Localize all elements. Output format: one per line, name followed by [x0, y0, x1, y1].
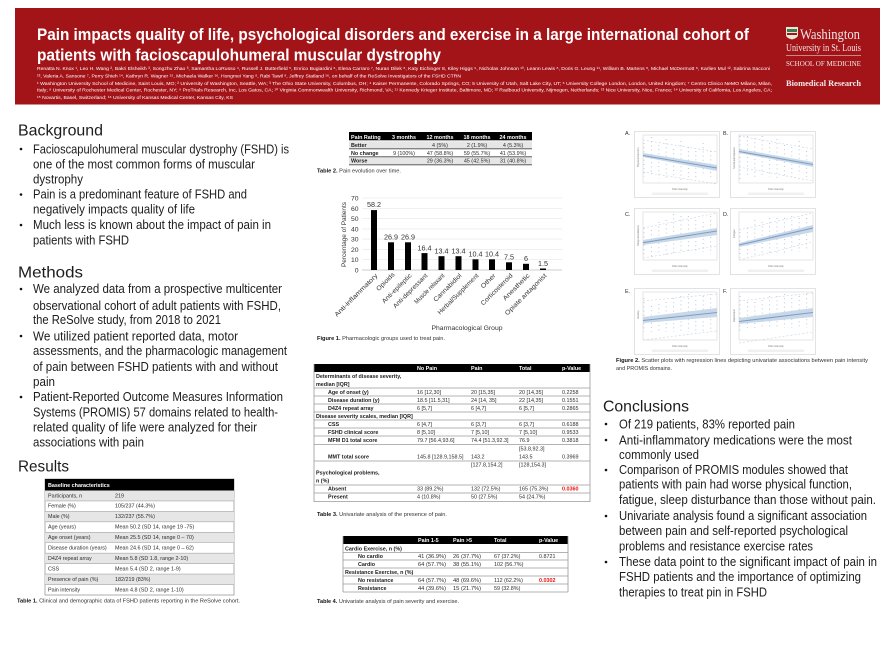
category labels: Muscle relaxant [413, 272, 447, 306]
table 3: presence of pain: [128,154.3] [519, 462, 546, 468]
methods bullets [20, 281, 287, 450]
methods bullets: We utilized patient reported data, motor [33, 328, 239, 343]
bar value labels: 26.9 [384, 232, 398, 242]
table 4: pain severity and exercise: 112 (62.2%) [494, 578, 523, 584]
table 4: pain severity and exercise: 26 (37.7%) [453, 554, 481, 560]
table 3: presence of pain: 165 (75.3%) [519, 486, 549, 492]
table 3: presence of pain: 6 [5,7] [519, 406, 534, 412]
table 3: presence of pain: No Pain [417, 366, 437, 372]
scatter plot F: depression [730, 288, 816, 354]
icon: shield [786, 27, 798, 40]
bar value labels: 13.4 [434, 246, 448, 256]
scatter plot B: social participation: Pain intensity [768, 187, 784, 191]
table 3: presence of pain: 20 [15,35] [471, 390, 495, 396]
table 2: 3 months [392, 135, 416, 141]
panel labels: B. [723, 131, 728, 137]
panel labels: A. [625, 131, 630, 137]
authors and affiliations: Italy; ⁸ University of Rochester Medical Center, Rochester, NY; ⁹ ProTrials Research, Inc, Los Gatos, CA; ¹⁰ Virginia Commonwealth University, Richmond, VA; ¹¹ Kennedy Krieger Institute, Baltimore, MD; ¹² Radboud University, Nijmegen, Netherlands; ¹³ Nice University, Nice, France; ¹⁴ University of California, Los Angeles, CA; [37, 88, 772, 92]
table 3: presence of pain: [127.8,154.2] [471, 462, 503, 468]
scatter plot C: sleep disturbance [634, 208, 720, 274]
table 3: presence of pain: Total [519, 366, 532, 372]
table 3: presence of pain: CSS [328, 422, 339, 428]
title: patients with facioscapulohumeral muscular dystrophy [37, 46, 442, 64]
category labels: Other [480, 272, 498, 290]
methods bullets: We analyzed data from a prospective multicenter [33, 281, 283, 296]
table 1: baseline characteristics: Mean 50.2 (SD 14, range 19 -75) [115, 525, 194, 531]
table 3: presence of pain: 143.5 [519, 454, 532, 460]
bar value labels [367, 200, 548, 268]
table 2: No change [351, 151, 379, 157]
bar value labels: 7.5 [504, 252, 514, 262]
panel: results [17, 459, 240, 604]
table 4: pain severity and exercise: 59 (32.8%) [494, 586, 521, 592]
bar value labels: 16.4 [418, 244, 432, 252]
table 3: presence of pain: 0.3818 [562, 438, 578, 444]
background bullets: dystrophy [33, 171, 83, 186]
table 3: presence of pain: D4Z4 repeat array [328, 406, 374, 412]
bar value labels: 6 [524, 254, 528, 263]
table 4 caption: Table 4. Univariate analysis of pain severity and exercise. [317, 599, 459, 605]
logo: Washington University School of Medicine: Biomedical Research [786, 79, 862, 88]
background bullets: negatively impacts quality of life [33, 202, 195, 217]
scatter plot A: physical function: Physical function [636, 147, 640, 167]
conclusions bullets: Of 219 patients, 83% reported pain [619, 416, 795, 431]
methods bullets: the ReSolve study, from 2018 to 2021 [33, 312, 221, 327]
category labels: Corticosteroid [480, 272, 515, 307]
table 3: presence of pain: Determinants of disease severity, [316, 374, 402, 380]
table 1: baseline characteristics: D4Z4 repeat array [48, 556, 92, 562]
background bullets: patients with FSHD [33, 232, 129, 247]
table 3: presence of pain: 6 [3,7] [471, 422, 486, 428]
table 4: pain severity and exercise: 102 (56.7%) [494, 562, 524, 568]
table 2 [349, 132, 532, 165]
table 3: presence of pain: 6 [4,7] [417, 422, 432, 428]
table 3: presence of pain: Absent [328, 486, 346, 492]
table 3: presence of pain: 143.2 [471, 454, 484, 460]
table 3: presence of pain: Disease severity scales, median [IQR] [316, 414, 413, 420]
table 2: 4 (5.3%) [503, 143, 523, 149]
scatter plot A: physical function: Pain intensity [672, 187, 688, 191]
table 3: presence of pain: 132 (72.5%) [471, 486, 501, 492]
table 2: Better [351, 143, 367, 149]
table 2: Worse [351, 159, 367, 165]
y axis title: Percentage of Patients [341, 202, 348, 267]
panel labels [625, 131, 728, 295]
table 1: baseline characteristics: Age (years) [48, 525, 76, 531]
table 3: presence of pain: 79.7 [56.4,93.6] [417, 438, 455, 444]
methods bullets: Systems (PROMIS) 57 domains related to health- [33, 405, 278, 420]
table 4: pain severity and exercise: Cardio Exercise, n (%) [345, 546, 402, 552]
table 3: presence of pain: 7 [5,10] [519, 430, 537, 436]
category labels: Opiate antagonist [504, 272, 549, 317]
table 3: presence of pain: 0.2258 [562, 390, 578, 396]
scatter plot E: anxiety: Pain intensity [672, 344, 688, 348]
table 2: 59 (55.7%) [464, 151, 490, 157]
table 3: presence of pain: 0.0360 [562, 486, 578, 492]
table 4: pain severity and exercise: 48 (69.6%) [453, 578, 481, 584]
conclusions bullets: commonly used [619, 447, 699, 462]
table 3: presence of pain: 74.4 [51.3,92.3] [471, 438, 509, 444]
authors and affiliations: ¹⁵ Novartis, Basel, Switzerland; ¹⁶ University of Kansas Medical Center, Kansas City, KS [37, 95, 233, 100]
table 1: baseline characteristics: Mean 5.8 (SD 1.8, range 2-10) [115, 556, 188, 562]
y axis labels: 10 [351, 257, 359, 264]
logo: Washington University School of Medicine: Washington [800, 27, 860, 43]
table 1 caption: Table 1. Clinical and demographic data of FSHD patients reporting in the ReSolve cohort. [17, 598, 240, 604]
scatter plot D: fatigue: Fatigue [732, 229, 736, 238]
table 3: presence of pain: Psychological problems, [316, 470, 380, 476]
table 4: pain severity and exercise: 38 (55.1%) [453, 562, 481, 568]
table 1: baseline characteristics: Disease duration (years) [48, 546, 107, 552]
table 3: presence of pain: MMT total score [328, 454, 369, 460]
logo: Washington University School of Medicine: SCHOOL OF MEDICINE [786, 59, 861, 68]
scatter plot F: depression: Pain intensity [768, 344, 784, 348]
table 2: 2 (1.9%) [467, 143, 487, 149]
table 4: pain severity and exercise: 0.8721 [539, 554, 556, 560]
table 3: presence of pain: 0.1551 [562, 398, 578, 404]
table 2: 12 months [427, 135, 453, 141]
y axis labels: 60 [351, 206, 359, 213]
methods bullets: of pain between FSHD patients with and without [33, 359, 278, 374]
bars [371, 210, 546, 270]
table 1: baseline characteristics: Mean 4.8 (SD 2, range 1-10) [115, 587, 184, 593]
conclusions bullets: therapies to treat pin in FSHD [619, 585, 767, 600]
table 3: presence of pain: 20 [14,35] [519, 390, 543, 396]
bar value labels: 13.4 [452, 246, 466, 256]
y axis labels: 0 [355, 268, 359, 274]
logo: Washington University School of Medicine [786, 27, 862, 88]
table 4: pain severity and exercise: 15 (21.7%) [453, 586, 481, 592]
table 3: presence of pain: 0.2865 [562, 406, 578, 412]
table 1: baseline characteristics: Age onset (years) [48, 535, 91, 541]
heading: background: Background [18, 123, 103, 140]
table 2: 41 (53.9%) [500, 151, 526, 157]
table 4: pain severity and exercise: 41 (36.9%) [418, 554, 446, 560]
table 2: 31 (40.8%) [500, 159, 526, 165]
table 4: pain severity and exercise: No cardio [358, 554, 384, 560]
table 3: presence of pain: 145.8 [128.9,158.5] [417, 454, 464, 460]
scatter plot F: depression: Depression [732, 308, 736, 322]
table 4: pain severity and exercise: Pain 1-5 [418, 538, 439, 544]
table 3: presence of pain: Age of onset (y) [328, 390, 369, 396]
table 3: presence of pain: 8 [5,10] [417, 430, 435, 436]
table 3: presence of pain: MFM D1 total score [328, 438, 377, 444]
figure 2 caption [616, 358, 869, 372]
figure 2 caption: and PROMIS domains. [616, 366, 672, 372]
y axis labels [351, 196, 359, 274]
scatter plot C: sleep disturbance: Sleep disturbance [636, 225, 640, 246]
category labels: Herbal/Supplement [437, 272, 481, 316]
table 4: pain severity and exercise: p-Value [539, 538, 558, 544]
table 3: presence of pain [314, 364, 590, 502]
y axis labels: 30 [351, 237, 359, 244]
background bullets: Much less is known about the impact of pain in [33, 217, 271, 232]
table 3: presence of pain: Disease duration (y) [328, 398, 380, 404]
table 3: presence of pain: n (%) [316, 478, 329, 484]
table 1: baseline characteristics: CSS [48, 566, 59, 572]
table 1: baseline characteristics [45, 479, 234, 595]
table 3: presence of pain: median [IQR] [316, 382, 350, 388]
table 3: presence of pain: 18.5 [11.5,31] [417, 398, 450, 404]
table 3: presence of pain: FSHD clinical score [328, 430, 378, 436]
bar value labels: 10.4 [485, 250, 499, 258]
methods bullets: pain [33, 374, 55, 389]
table 2: 4 (5%) [432, 143, 448, 149]
panel labels: C. [625, 212, 630, 218]
bar value labels: 10.4 [468, 250, 482, 258]
y axis labels: 50 [351, 216, 359, 223]
authors and affiliations: ¹ Washington University School of Medicine, Saint Louis, MO; ² University of Washington, Seattle, WA; ³ The Ohio State University, Columbus, OH; ⁴ Kaiser Permanente, Colorado Springs, CO; 5 University of Utah, Salt Lake City, UT; ⁶ University College London, London, United Kingdom; ⁷ Centro Clinico NeMO Milano, Milan, [37, 81, 772, 86]
figure 1 caption: Figure 1. Pharmacologic groups used to treat pain. [317, 336, 445, 342]
table 3: presence of pain: p-Value [562, 366, 581, 372]
category labels: Anti-epileptic [381, 272, 414, 305]
panel labels: D. [723, 212, 728, 218]
table 1: baseline characteristics: 132/237 (55.7%) [115, 514, 155, 520]
table 4: pain severity and exercise: Resistance Exercise, n (%) [345, 570, 414, 576]
background bullets: one of the most common forms of muscular [33, 156, 256, 171]
table 4: pain severity and exercise [343, 536, 568, 592]
title: Pain impacts quality of life, psychological disorders and exercise in a large international cohort of [37, 25, 749, 44]
table 3: presence of pain: 54 (24.7%) [519, 494, 546, 500]
category labels: Anti-inflammatory [333, 272, 380, 318]
authors and affiliations [37, 66, 772, 100]
table 3 caption: Table 3. Univariate analysis of the presence of pain. [317, 512, 447, 518]
conclusions bullets: between pain and self-reported psychological [619, 523, 848, 538]
methods bullets: observational cohort of adult patients with FSHD, [33, 298, 281, 313]
category labels [333, 271, 549, 318]
table 1: baseline characteristics: 219 [115, 493, 124, 499]
table 1: baseline characteristics: Mean 24.6 (SD 14, range 0 – 62) [115, 546, 194, 552]
conclusions bullets: patients with pain had worse physical function, [619, 476, 852, 492]
table 3: presence of pain: 0.9533 [562, 430, 578, 436]
table 3: presence of pain: 22 [14,35] [519, 398, 543, 404]
table 3: presence of pain: [53.8,92.3] [519, 446, 545, 452]
bar value labels: 1.5 [538, 259, 548, 268]
heading: methods: Methods [18, 265, 83, 282]
table 4: pain severity and exercise: No resistance [358, 578, 393, 584]
heading: conclusions: Conclusions [603, 399, 689, 416]
table 3: presence of pain: 24 [14, 35] [471, 398, 497, 404]
background bullets: Pain is a predominant feature of FSHD and [33, 187, 247, 202]
table 3: presence of pain: Pain [471, 366, 482, 372]
table 3: presence of pain: 0.6188 [562, 422, 578, 428]
header banner [15, 8, 880, 104]
table 4: pain severity and exercise: 67 (37.2%) [494, 554, 521, 560]
table 3: presence of pain: 76.9 [519, 438, 530, 444]
table 1: baseline characteristics: Mean 25.5 (SD 14, range 0 – 70) [115, 535, 194, 541]
conclusions bullets [605, 416, 877, 600]
panel labels: E. [625, 289, 630, 295]
table 2: Pain Rating [351, 135, 381, 141]
heading: results: Results [18, 459, 69, 476]
scatter plot B: social participation: Social participation [732, 147, 736, 169]
table 4: pain severity and exercise: 44 (39.6%) [418, 586, 446, 592]
table 2: 29 (36.3%) [427, 159, 453, 165]
bar value labels: 26.9 [401, 232, 415, 242]
bar chart: pharmacologic groups [333, 196, 562, 332]
methods bullets: Patient-Reported Outcome Measures Information [33, 389, 283, 404]
table 3: presence of pain: 16 [12,30] [417, 390, 441, 396]
methods bullets: associations with pain [33, 435, 144, 450]
background bullets [20, 141, 289, 247]
table 2: 24 months [500, 135, 526, 141]
scatter plot D: fatigue: Pain intensity [768, 264, 784, 268]
conclusions bullets: Anti-inflammatory medications were the most [619, 432, 852, 447]
table 3: presence of pain: 33 (89.2%) [417, 486, 444, 492]
table 1: baseline characteristics: 105/237 (44.3%) [115, 504, 155, 510]
panel: conclusions [603, 399, 877, 600]
scatter plot B: social participation [730, 132, 816, 198]
scatter plot E: anxiety [634, 288, 720, 354]
x axis title: Pharmacological Group [431, 325, 503, 332]
authors and affiliations: ¹³, Valeria A. Sansone ⁷, Perry Shieh ¹⁴, Kathryn R. Wagner ¹⁵, Michaela Walker ¹⁶, Hongmei Yang ⁸, Rabi Tawil ⁸, Jeffrey Statland ¹⁶, on behalf of the ReSolve Investigators of the FSHD CTRN [37, 74, 461, 78]
table 4: pain severity and exercise: Total [494, 538, 507, 544]
table 4: pain severity and exercise: Resistance [358, 586, 386, 592]
scatter plot A: physical function [634, 132, 720, 198]
conclusions bullets: FSHD patients and the importance of optimizing [619, 569, 861, 584]
y axis labels: 40 [351, 226, 359, 233]
table 1: baseline characteristics: Male (%) [48, 514, 70, 520]
table 2: 47 (58.8%) [427, 151, 453, 157]
category labels: Opioids [375, 271, 396, 293]
panel: table 2 pain evolution [317, 132, 532, 174]
panel labels: F. [723, 289, 727, 295]
bar value labels: 58.2 [367, 200, 381, 209]
table 2: 9 (100%) [393, 151, 415, 157]
table 1: baseline characteristics: Mean 5.4 (SD 2, range 1-9) [115, 566, 181, 572]
background bullets: Facioscapulohumeral muscular dystrophy (FSHD) is [33, 141, 289, 156]
table 1: baseline characteristics: Presence of pain (%) [48, 577, 99, 583]
table 3: presence of pain: 0.3969 [562, 454, 578, 460]
logo: Washington University School of Medicine: University in St. Louis [786, 42, 861, 54]
table 3: presence of pain: 7 [5,10] [471, 430, 489, 436]
conclusions bullets: Comparison of PROMIS modules showed that [619, 462, 848, 477]
table 4: pain severity and exercise: 64 (57.7%) [418, 578, 446, 584]
scatter plot D: fatigue [730, 208, 816, 274]
table 3: presence of pain: 6 [5,7] [417, 406, 432, 412]
table 3: presence of pain: Present [328, 494, 348, 500]
table 4: pain severity and exercise: 0.0302 [539, 578, 556, 584]
table 1: baseline characteristics: Pain intensity [48, 587, 80, 593]
table 4: pain severity and exercise: Cardio [358, 562, 376, 568]
panel: background [18, 123, 289, 247]
table 1: baseline characteristics: Baseline characteristics [48, 483, 110, 489]
category labels: Anesthetic [502, 272, 532, 302]
category labels: Cannabidiol [432, 272, 463, 304]
table 1: baseline characteristics: Participants, n [48, 493, 82, 499]
y axis labels: 70 [351, 196, 359, 202]
y axis labels: 20 [351, 247, 359, 254]
scatter plot C: sleep disturbance: Pain intensity [672, 264, 688, 268]
table 2 caption: Table 2. Pain evolution over time. [317, 168, 401, 174]
table 3: presence of pain: 6 [4,7] [471, 406, 486, 412]
table 2: 18 months [464, 135, 490, 141]
figure 2 caption: Figure 2. Scatter plots with regression lines depicting univariate associations between pain intensity [616, 358, 869, 364]
table 3: presence of pain: 6 [3,7] [519, 422, 534, 428]
table 1: baseline characteristics: 182/219 (83%) [115, 577, 151, 583]
panel: methods [18, 265, 287, 450]
table 3: presence of pain: 50 (27.5%) [471, 494, 498, 500]
methods bullets: assessments, and the pharmacologic management [33, 343, 287, 358]
title [37, 25, 749, 64]
table 2: 45 (42.5%) [464, 159, 490, 165]
scatter plot E: anxiety: Anxiety [636, 310, 640, 319]
authors and affiliations: Renatta N. Knox ¹, Leo H. Wang ², Bakri Elsheikh ³, Songzhu Zhao ³, Samantha LoRusso ⁴, Russell J. Butterfield ⁵, Enrico Bugiardini ⁶, Elena Carraro ⁷, Nuran Dilek ⁸, Katy Eichinger 8, Kiley Higgs ⁹, Nicholas Johnson ¹⁰, Leann Lewis ⁸, Doris G. Leung ¹¹, William B. Martens ⁸, Michael McDermott ⁸, Karlien Mul ¹², Sabrina Sacconi [37, 66, 770, 71]
conclusions bullets: problems and resistance exercise rates [619, 539, 813, 554]
panel: scatter plots [616, 131, 869, 372]
table 4: pain severity and exercise: 64 (57.7%) [418, 562, 446, 568]
table 3: presence of pain: 4 (10.8%) [417, 494, 441, 500]
table 1: baseline characteristics: Female (%) [48, 504, 76, 510]
methods bullets: related quality of life were analyzed for their [33, 420, 258, 435]
category labels: Anti-depressant [392, 272, 430, 310]
table 4: pain severity and exercise: Pain >5 [453, 538, 472, 544]
